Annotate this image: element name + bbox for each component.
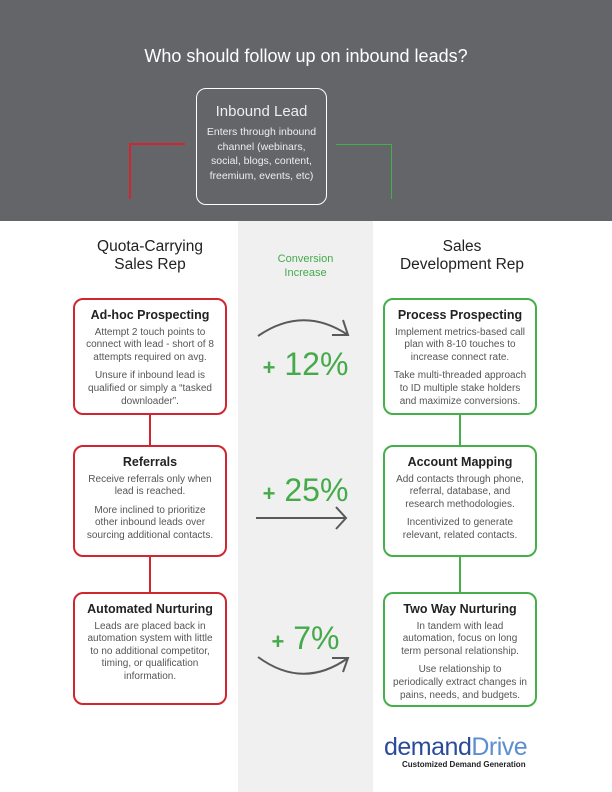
heading: SDR: Sales bbox=[443, 238, 481, 255]
box: account mapping: Add contacts through phone, referral, database, and research methodologies. bbox=[396, 474, 524, 510]
connectors between boxes bbox=[149, 414, 151, 594]
box: two way nurturing bbox=[383, 592, 537, 707]
box: automated nurturing: Automated Nurturing bbox=[87, 602, 213, 616]
center column background bbox=[238, 221, 373, 792]
green connector bbox=[336, 144, 392, 199]
box: account mapping: Account Mapping bbox=[408, 455, 512, 469]
box: two way nurturing: Use relationship to periodically extract changes in pains, needs, and budgets. bbox=[393, 664, 527, 701]
arrows bbox=[256, 319, 350, 675]
box: process prospecting: Implement metrics-based call plan with 8-10 touches to increase connect rate. bbox=[395, 327, 525, 363]
box: process prospecting: Take multi-threaded approach to ID multiple stake holders and maximize conversions. bbox=[394, 370, 526, 407]
heading: SDR bbox=[400, 238, 524, 273]
pct 25: + 25% bbox=[263, 472, 348, 508]
heading: conversion increase: Conversion bbox=[278, 253, 333, 265]
box: account mapping bbox=[383, 445, 537, 557]
heading: conversion increase: Increase bbox=[284, 267, 327, 279]
box: automated nurturing bbox=[73, 592, 227, 705]
box: process prospecting bbox=[383, 298, 537, 415]
inbound lead box bbox=[196, 88, 327, 205]
header background bbox=[0, 0, 612, 221]
box: automated nurturing: Leads are placed back in automation system with little to no additional competitor, timing, or qualification information. bbox=[87, 621, 213, 682]
heading: quota-carrying bbox=[97, 238, 203, 273]
box: ad-hoc prospecting: Attempt 2 touch points to connect with lead - short of 8 attempts required on avg. bbox=[86, 327, 214, 363]
pct 12: + 12% bbox=[263, 346, 348, 382]
inbound lead box: Enters through inbound channel (webinars, social, blogs, content, freemium, events, etc) bbox=[207, 126, 316, 182]
heading: SDR: Development Rep bbox=[400, 256, 524, 273]
pct 7: + 7% bbox=[272, 620, 340, 656]
logo: Customized Demand Generation bbox=[402, 760, 526, 769]
box: two way nurturing: In tandem with lead automation, focus on long term personal relationship. bbox=[401, 621, 519, 657]
box: referrals: More inclined to prioritize other inbound leads over sourcing additional contacts. bbox=[87, 505, 213, 541]
box: process prospecting: Process Prospecting bbox=[398, 308, 522, 322]
inbound lead box: Inbound Lead bbox=[216, 103, 307, 120]
box: ad-hoc prospecting bbox=[73, 298, 227, 415]
box: ad-hoc prospecting: Ad-hoc Prospecting bbox=[91, 308, 209, 322]
box: ad-hoc prospecting: Unsure if inbound lead is qualified or simply a “tasked downloader”. bbox=[88, 370, 212, 407]
box: account mapping: Incentivized to generate relevant, related contacts. bbox=[403, 517, 517, 541]
red connector bbox=[129, 143, 185, 199]
box: referrals: Referrals bbox=[123, 455, 177, 469]
heading: conversion increase bbox=[278, 253, 333, 279]
heading: quota-carrying: Sales Rep bbox=[114, 256, 186, 273]
logo: demandDrive bbox=[384, 733, 527, 761]
title: Who should follow up on inbound leads? bbox=[144, 46, 468, 66]
heading: quota-carrying: Quota-Carrying bbox=[97, 238, 203, 255]
box: referrals bbox=[73, 445, 227, 557]
box: two way nurturing: Two Way Nurturing bbox=[403, 602, 517, 616]
box: referrals: Receive referrals only when lead is reached. bbox=[88, 474, 212, 497]
